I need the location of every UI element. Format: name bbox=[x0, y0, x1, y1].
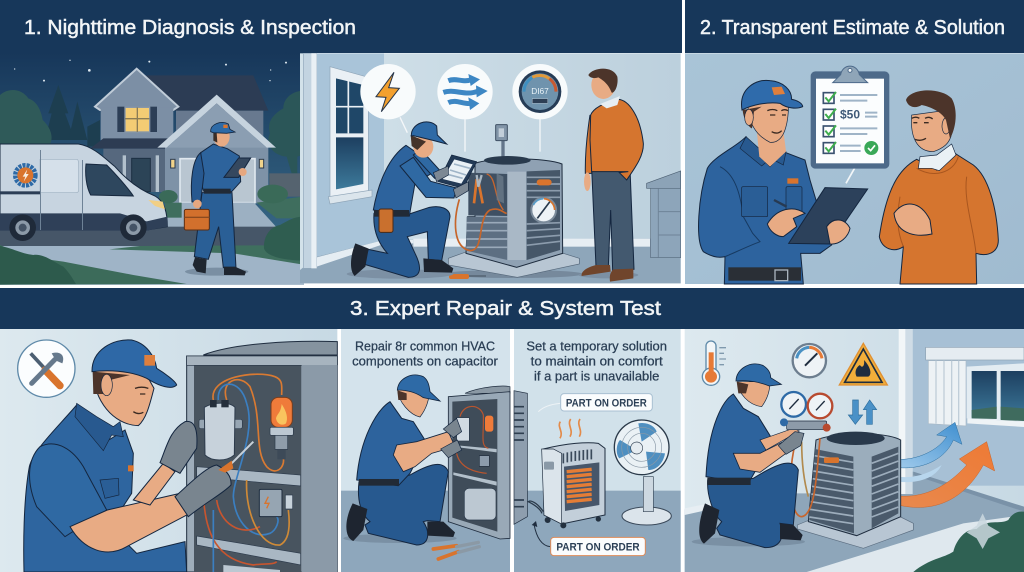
open service cabinet bbox=[187, 341, 337, 572]
caption: repair bbox=[352, 340, 498, 369]
icon: digital gauge bubble bbox=[512, 64, 568, 152]
storage box bbox=[647, 171, 681, 258]
capacitor bbox=[199, 400, 242, 460]
sparkle bbox=[967, 513, 1000, 549]
relay block bbox=[259, 489, 293, 517]
AC unit and manifold hoses bbox=[791, 432, 913, 548]
stars bbox=[14, 60, 287, 82]
panel: transparent estimate bbox=[685, 53, 1024, 284]
house bbox=[90, 69, 303, 203]
head bbox=[93, 363, 154, 426]
face details: technician bbox=[767, 109, 788, 133]
pliers and wires bbox=[474, 179, 483, 203]
technician with clipboard bbox=[699, 80, 868, 284]
window with curtain bbox=[926, 347, 1024, 427]
panel: night exterior scene bbox=[0, 53, 304, 285]
homeowner listening bbox=[879, 90, 998, 284]
header bar: step 1 bbox=[0, 0, 682, 53]
panel: system test bbox=[685, 329, 1024, 572]
caption: repair: components on capacitor bbox=[352, 355, 498, 369]
kneeling technician with tablet bbox=[347, 122, 477, 279]
technician close-up bbox=[24, 340, 253, 572]
van logo bbox=[15, 165, 35, 185]
forearms bbox=[70, 493, 190, 552]
trees bbox=[0, 85, 303, 173]
panel: wall and outdoor unit inspection bbox=[300, 53, 681, 283]
airflow arrows bbox=[883, 422, 995, 507]
caption: temporary solution bbox=[526, 340, 667, 383]
icon: lightning bubble bbox=[360, 64, 416, 133]
panel: temporary solution step bbox=[514, 329, 681, 572]
icon: tools badge bbox=[18, 340, 75, 397]
panel: capacitor repair close-up bbox=[0, 329, 337, 572]
caption: temporary solution: to maintain on comfort bbox=[531, 355, 663, 369]
label: part on order bottom: PART ON ORDER bbox=[556, 542, 640, 554]
technician kneeling bbox=[343, 375, 462, 545]
screwdriver bbox=[228, 442, 253, 467]
face details: close-up bbox=[133, 387, 148, 414]
caption: temporary solution: if a part is unavailable bbox=[534, 369, 659, 383]
panel: component repair step bbox=[341, 329, 510, 572]
van bbox=[0, 144, 167, 241]
orange test cable bbox=[455, 199, 507, 251]
unit edge bbox=[514, 391, 527, 524]
pliers on floor bbox=[433, 542, 479, 559]
wall switch box bbox=[496, 125, 507, 157]
icon: pressure arrows bbox=[848, 400, 877, 424]
space heater bbox=[528, 443, 605, 528]
heading: step 1: 1. Nighttime Diagnosis & Inspection bbox=[24, 17, 356, 39]
label: part on order bottom bbox=[532, 521, 645, 556]
icon: thermometer bbox=[702, 341, 726, 385]
icon: airflow bubble bbox=[437, 64, 493, 152]
window bbox=[328, 67, 372, 204]
clipboard with checklist: $50 bbox=[840, 108, 860, 122]
technician with toolbox bbox=[184, 122, 251, 276]
icon: fire warning bbox=[839, 343, 887, 385]
outdoor AC unit bbox=[443, 156, 583, 278]
gloves bbox=[175, 465, 231, 517]
icon: heat waves bbox=[559, 419, 581, 438]
clipboard with checklist bbox=[811, 66, 889, 183]
technician with manifold gauges bbox=[692, 364, 805, 548]
icon: pressure dial bbox=[793, 344, 826, 377]
label: part on order top: PART ON ORDER bbox=[566, 397, 647, 409]
caption: temporary solution: Set a temporary solution bbox=[526, 340, 667, 354]
wiring bbox=[213, 374, 284, 471]
caption: repair: Repair 8r common HVAC bbox=[355, 340, 495, 354]
header bar: step 2 bbox=[685, 0, 1024, 53]
face details: homeowner bbox=[912, 117, 933, 140]
glowing fuse bbox=[270, 397, 293, 459]
heading: step 3: 3. Expert Repair & System Test bbox=[350, 298, 661, 320]
screwdriver bbox=[449, 274, 486, 279]
icon: digital gauge bubble: DI67 bbox=[531, 86, 549, 96]
manifold gauge set bbox=[780, 392, 832, 432]
clipboard in hand bbox=[789, 188, 868, 244]
shrub bbox=[913, 511, 1024, 572]
gauge on unit bbox=[531, 198, 556, 222]
heading: step 2: 2. Transparent Estimate & Solution bbox=[700, 17, 1005, 39]
label: part on order top bbox=[538, 394, 652, 412]
desk fan bbox=[614, 420, 671, 525]
service cabinet bbox=[448, 386, 510, 539]
header bar: step 3 bbox=[0, 288, 1024, 329]
homeowner bbox=[578, 69, 643, 282]
yard and driveway bbox=[0, 185, 304, 285]
